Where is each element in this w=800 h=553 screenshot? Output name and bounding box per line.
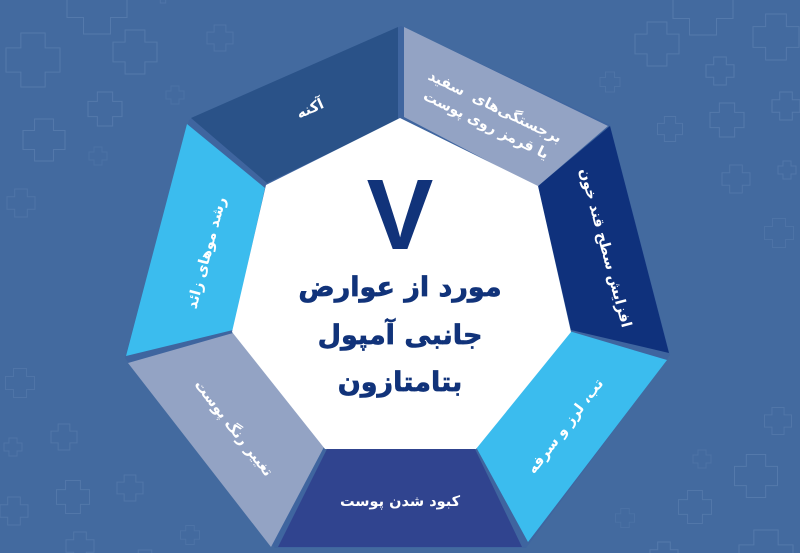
panel: fever, chills and cough (476, 331, 667, 542)
title line 2: جانبی آمپول (318, 318, 482, 351)
label: white or red skin bumps: برجستگی‌های سفید (425, 66, 565, 147)
title line 3: بتامتازون (338, 367, 462, 398)
label: high blood sugar: افزایش سطح قند خون (576, 167, 634, 329)
panel: skin discoloration (128, 333, 324, 547)
central white heptagon (232, 118, 571, 449)
panel: white or red skin bumps (404, 27, 608, 187)
panel: acne (191, 27, 398, 183)
title (298, 159, 502, 398)
label: acne: آکنه (293, 94, 327, 122)
panel: high blood sugar (538, 126, 669, 353)
heptagon ring seams (125, 26, 670, 548)
label: excess hair growth: رشد موهای زائد (185, 195, 230, 311)
label: second line: یا قرمز روی پوست (421, 88, 551, 163)
title line 1: مورد از عوارض (298, 272, 502, 303)
panel: excess hair growth (126, 124, 265, 356)
panel: skin bruising (278, 449, 522, 547)
label: skin discoloration: تغییر رنگ پوست (191, 376, 277, 480)
label: skin bruising: کبود شدن پوست (340, 494, 461, 510)
label: fever, chills and cough: تب، لرز و سرفه (525, 376, 607, 477)
number seven: V (367, 159, 434, 271)
